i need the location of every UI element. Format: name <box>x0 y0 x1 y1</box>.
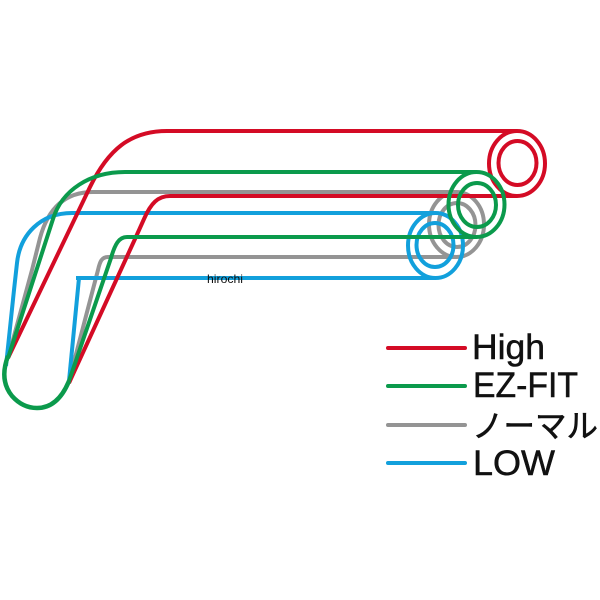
handlebar: normal (gray) <box>8 192 484 381</box>
legend item: High: High <box>472 328 545 367</box>
legend item: LOW: LOW <box>473 444 555 483</box>
watermark: hirochi <box>207 272 243 286</box>
legend <box>388 328 598 483</box>
legend item: EZ-FIT: EZ-FIT <box>473 366 578 405</box>
handlebar: High (red) <box>8 131 545 383</box>
handlebar: LOW (blue) <box>6 213 463 381</box>
handlebar: EZ-FIT (green) <box>8 172 504 381</box>
legend item: normal: ノーマル <box>472 408 598 444</box>
grip end loop <box>4 356 69 408</box>
